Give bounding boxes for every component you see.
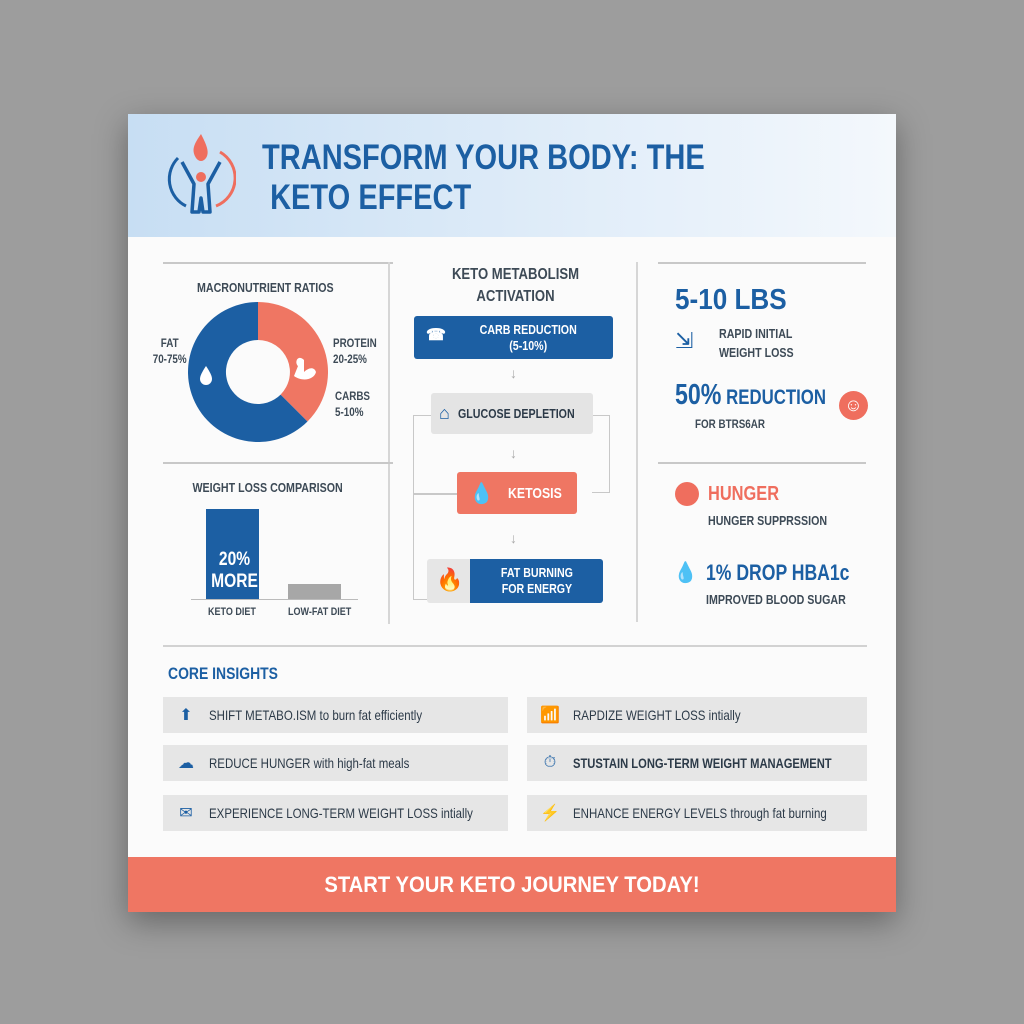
step: fat burning: FOR ENERGY bbox=[501, 581, 572, 596]
title: TRANSFORM YOUR BODY: THE bbox=[262, 138, 705, 177]
panel: stats: 1% DROP HBA1c bbox=[706, 560, 849, 585]
card bbox=[128, 114, 896, 912]
step: fat burning: 🔥 bbox=[436, 567, 463, 592]
header band bbox=[128, 114, 896, 237]
vertical divider bbox=[388, 262, 390, 624]
vertical divider bbox=[636, 262, 638, 622]
core insights: ⚡ bbox=[540, 805, 560, 822]
panel: macronutrient ratios: PROTEIN bbox=[333, 336, 377, 350]
title: KETO EFFECT bbox=[270, 178, 471, 217]
step: carb reduction: (5-10%) bbox=[510, 338, 547, 353]
core insights: REDUCE HUNGER with high-fat meals bbox=[209, 755, 409, 771]
step: carb reduction: ☎ bbox=[426, 327, 446, 344]
panel: stats: HUNGER bbox=[708, 483, 779, 505]
panel: keto metabolism flow: ↓ bbox=[510, 445, 517, 461]
core insights: 📶 bbox=[540, 707, 560, 724]
panel: weight loss comparison: KETO DIET bbox=[208, 606, 256, 618]
panel: keto metabolism flow: KETO METABOLISM bbox=[451, 266, 579, 283]
flow lines bbox=[413, 415, 431, 600]
panel: stats: WEIGHT LOSS bbox=[719, 345, 794, 360]
step: ketosis: 💧 bbox=[469, 482, 494, 504]
step: glucose depletion bbox=[431, 393, 593, 434]
panel: macronutrient ratios: FAT bbox=[161, 336, 179, 350]
stat: 5-10 lbs: 5-10 LBS bbox=[675, 284, 787, 316]
panel: macronutrient ratios: 70-75% bbox=[153, 352, 187, 366]
step: carb reduction bbox=[414, 316, 613, 359]
panel: stats: RAPID INITIAL bbox=[719, 326, 792, 341]
heading: MACRONUTRIENT RATIOS bbox=[197, 280, 334, 295]
core insights: ENHANCE ENERGY LEVELS through fat burning bbox=[573, 805, 827, 821]
panel: macronutrient ratios: CARBS bbox=[335, 389, 370, 403]
panel: keto metabolism flow bbox=[413, 266, 613, 603]
panel: keto metabolism flow: ACTIVATION bbox=[476, 288, 554, 305]
icon: body with flame bbox=[168, 134, 236, 214]
core insights: RAPDIZE WEIGHT LOSS intially bbox=[573, 707, 741, 723]
footer banner: START YOUR KETO JOURNEY TODAY! bbox=[324, 872, 700, 897]
step: glucose depletion: GLUCOSE DEPLETION bbox=[458, 406, 575, 421]
panel: keto metabolism flow: ↓ bbox=[510, 365, 517, 381]
bar chart: 20% bbox=[219, 549, 250, 570]
core insights bbox=[163, 645, 867, 831]
bar chart bbox=[206, 509, 259, 599]
title bbox=[262, 138, 705, 217]
step: carb reduction: CARB REDUCTION bbox=[480, 322, 577, 337]
step: ketosis bbox=[457, 472, 577, 514]
donut chart bbox=[188, 302, 328, 442]
heading: CORE INSIGHTS bbox=[168, 664, 278, 683]
stat: HbA1c: 💧 bbox=[673, 562, 698, 584]
core insights: ✉ bbox=[179, 805, 193, 822]
stat: hunger bbox=[675, 482, 699, 506]
panel: stats: HUNGER SUPPRSSION bbox=[708, 513, 827, 528]
core insights: SHIFT METABO.ISM to burn fat efficiently bbox=[209, 707, 422, 723]
panel: stats: ⇲ bbox=[675, 328, 693, 353]
panel: macronutrient ratios: 20-25% bbox=[333, 352, 367, 366]
panel: weight loss comparison: LOW-FAT DIET bbox=[288, 606, 351, 618]
panel: weight loss comparison bbox=[163, 462, 393, 618]
core insights: STUSTAIN LONG-TERM WEIGHT MANAGEMENT bbox=[573, 755, 832, 771]
step: fat burning: FAT BURNING bbox=[500, 565, 573, 580]
core insights: ☁ bbox=[178, 755, 194, 772]
panel: keto metabolism flow: ↓ bbox=[510, 530, 517, 546]
panel: stats bbox=[658, 262, 868, 607]
panel: weight loss comparison: WEIGHT LOSS COMPARISON bbox=[193, 480, 343, 495]
step: fat burning bbox=[427, 559, 603, 603]
bar chart: MORE bbox=[211, 571, 258, 592]
panel: stats: IMPROVED BLOOD SUGAR bbox=[706, 592, 846, 607]
footer banner bbox=[128, 857, 896, 912]
stat: 50% reduction: 50% REDUCTION bbox=[675, 379, 826, 411]
step: glucose depletion: ⌂ bbox=[439, 403, 450, 423]
panel: stats: ☺ bbox=[844, 395, 863, 415]
panel: stats: FOR BTRS6AR bbox=[695, 417, 765, 431]
core insights: ⏱ bbox=[544, 754, 556, 771]
core insights: EXPERIENCE LONG-TERM WEIGHT LOSS intially bbox=[209, 805, 473, 821]
core insights: ⬆ bbox=[179, 707, 193, 724]
panel: macronutrient ratios bbox=[153, 262, 393, 442]
step: ketosis: KETOSIS bbox=[508, 484, 562, 502]
panel: macronutrient ratios: 5-10% bbox=[335, 405, 363, 419]
